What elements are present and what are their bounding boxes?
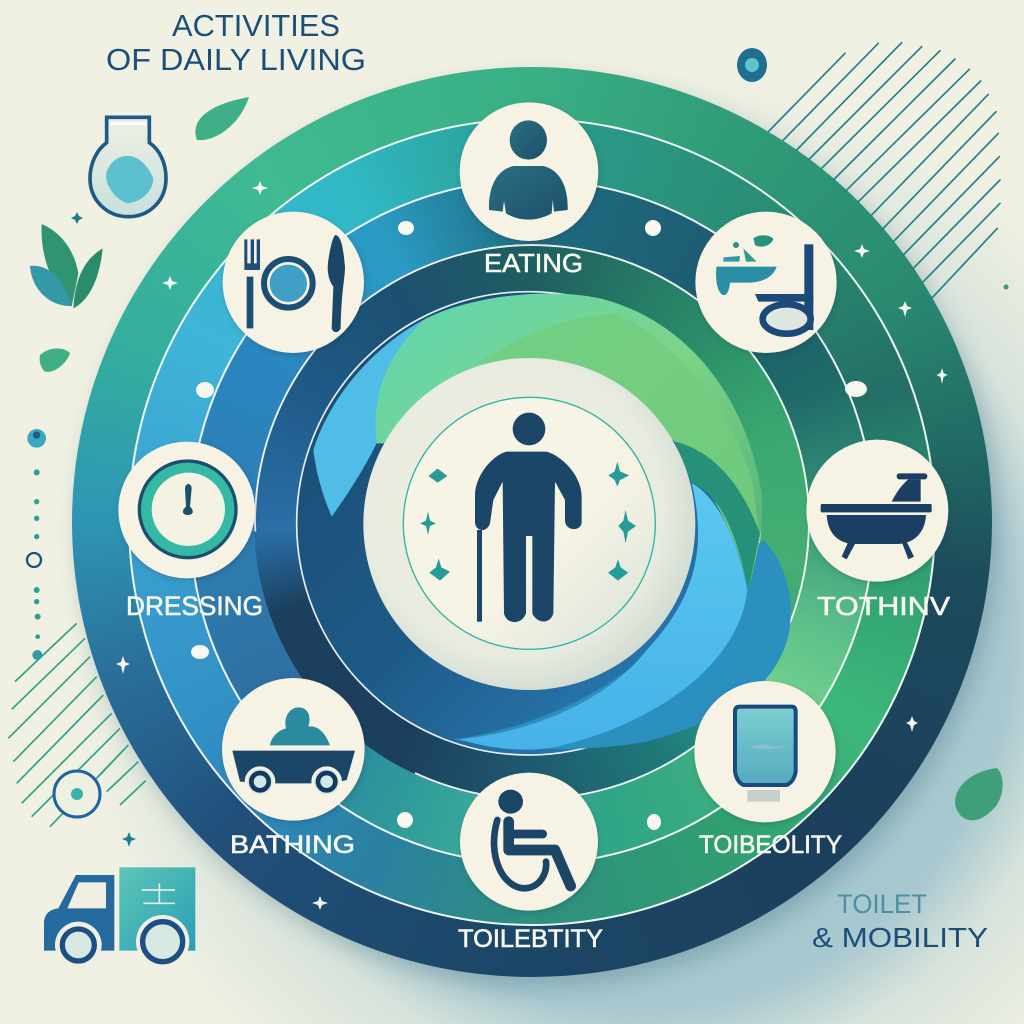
swirl: deeper green bbox=[477, 313, 760, 590]
title bbox=[106, 8, 366, 77]
decorative left dots bbox=[27, 429, 46, 660]
caption: toilet and mobility: TOILET bbox=[837, 889, 927, 919]
swirl: lower right blue crescent bbox=[453, 540, 791, 749]
icon: right leaf bbox=[955, 768, 1003, 820]
ring: outer band bbox=[72, 67, 992, 977]
label: toilebtity: TOILEBTITY bbox=[458, 925, 603, 953]
stripes: left bbox=[8, 623, 146, 827]
label: toibeolity: TOIBEOLITY bbox=[699, 831, 842, 859]
path dots bbox=[191, 220, 867, 830]
label: bathing: BATHING bbox=[230, 831, 355, 859]
swirl: green teal bbox=[374, 293, 762, 590]
node: person bbox=[460, 102, 598, 241]
center inner circle bbox=[403, 397, 655, 649]
ring: inner band outline bbox=[254, 244, 810, 800]
label: dressing: DRESSING bbox=[126, 591, 263, 621]
title: ACTIVITIES bbox=[172, 8, 340, 43]
icon: small leaf bbox=[40, 348, 70, 372]
ring: inner dark band bbox=[254, 244, 810, 800]
icon: top drop bbox=[737, 48, 767, 82]
swirl: left blue bbox=[313, 320, 423, 517]
sparkles: small stars bbox=[116, 181, 948, 910]
icon: truck bbox=[44, 867, 195, 968]
swirl: base disc bbox=[297, 292, 760, 755]
node: cart bbox=[222, 678, 365, 821]
center disc bbox=[363, 358, 695, 690]
caption: toilet and mobility: & MOBILITY bbox=[812, 922, 988, 953]
node: clock bbox=[118, 442, 255, 578]
label: tothiny: TOTHINV bbox=[817, 591, 951, 621]
node: fork and plate bbox=[223, 212, 364, 353]
labels bbox=[126, 248, 951, 953]
ring: second band bbox=[128, 118, 936, 926]
label: eating: EATING bbox=[484, 248, 583, 278]
swirl: light blue bbox=[460, 483, 747, 750]
node: sink and toilet bbox=[695, 212, 837, 353]
icon: target circle bbox=[54, 771, 100, 817]
title: OF DAILY LIVING bbox=[106, 42, 366, 77]
swirl: dark green wedge bbox=[675, 442, 760, 590]
icon: top leaf bbox=[195, 97, 249, 140]
node: wheelchair bbox=[460, 773, 598, 911]
sparkles: teal stars bbox=[71, 212, 1008, 847]
ring: third band bbox=[189, 179, 875, 865]
icon: round flask bbox=[90, 117, 166, 217]
node: container bbox=[694, 681, 836, 822]
node: bathtub bbox=[806, 440, 948, 582]
stripes: top right bbox=[768, 43, 1000, 298]
sparkles bbox=[420, 462, 636, 581]
icon: leaf sprig bbox=[30, 224, 103, 308]
caption: toilet and mobility bbox=[812, 889, 988, 953]
inner swirl bbox=[297, 292, 791, 755]
icon: older person with cane bbox=[475, 413, 582, 622]
